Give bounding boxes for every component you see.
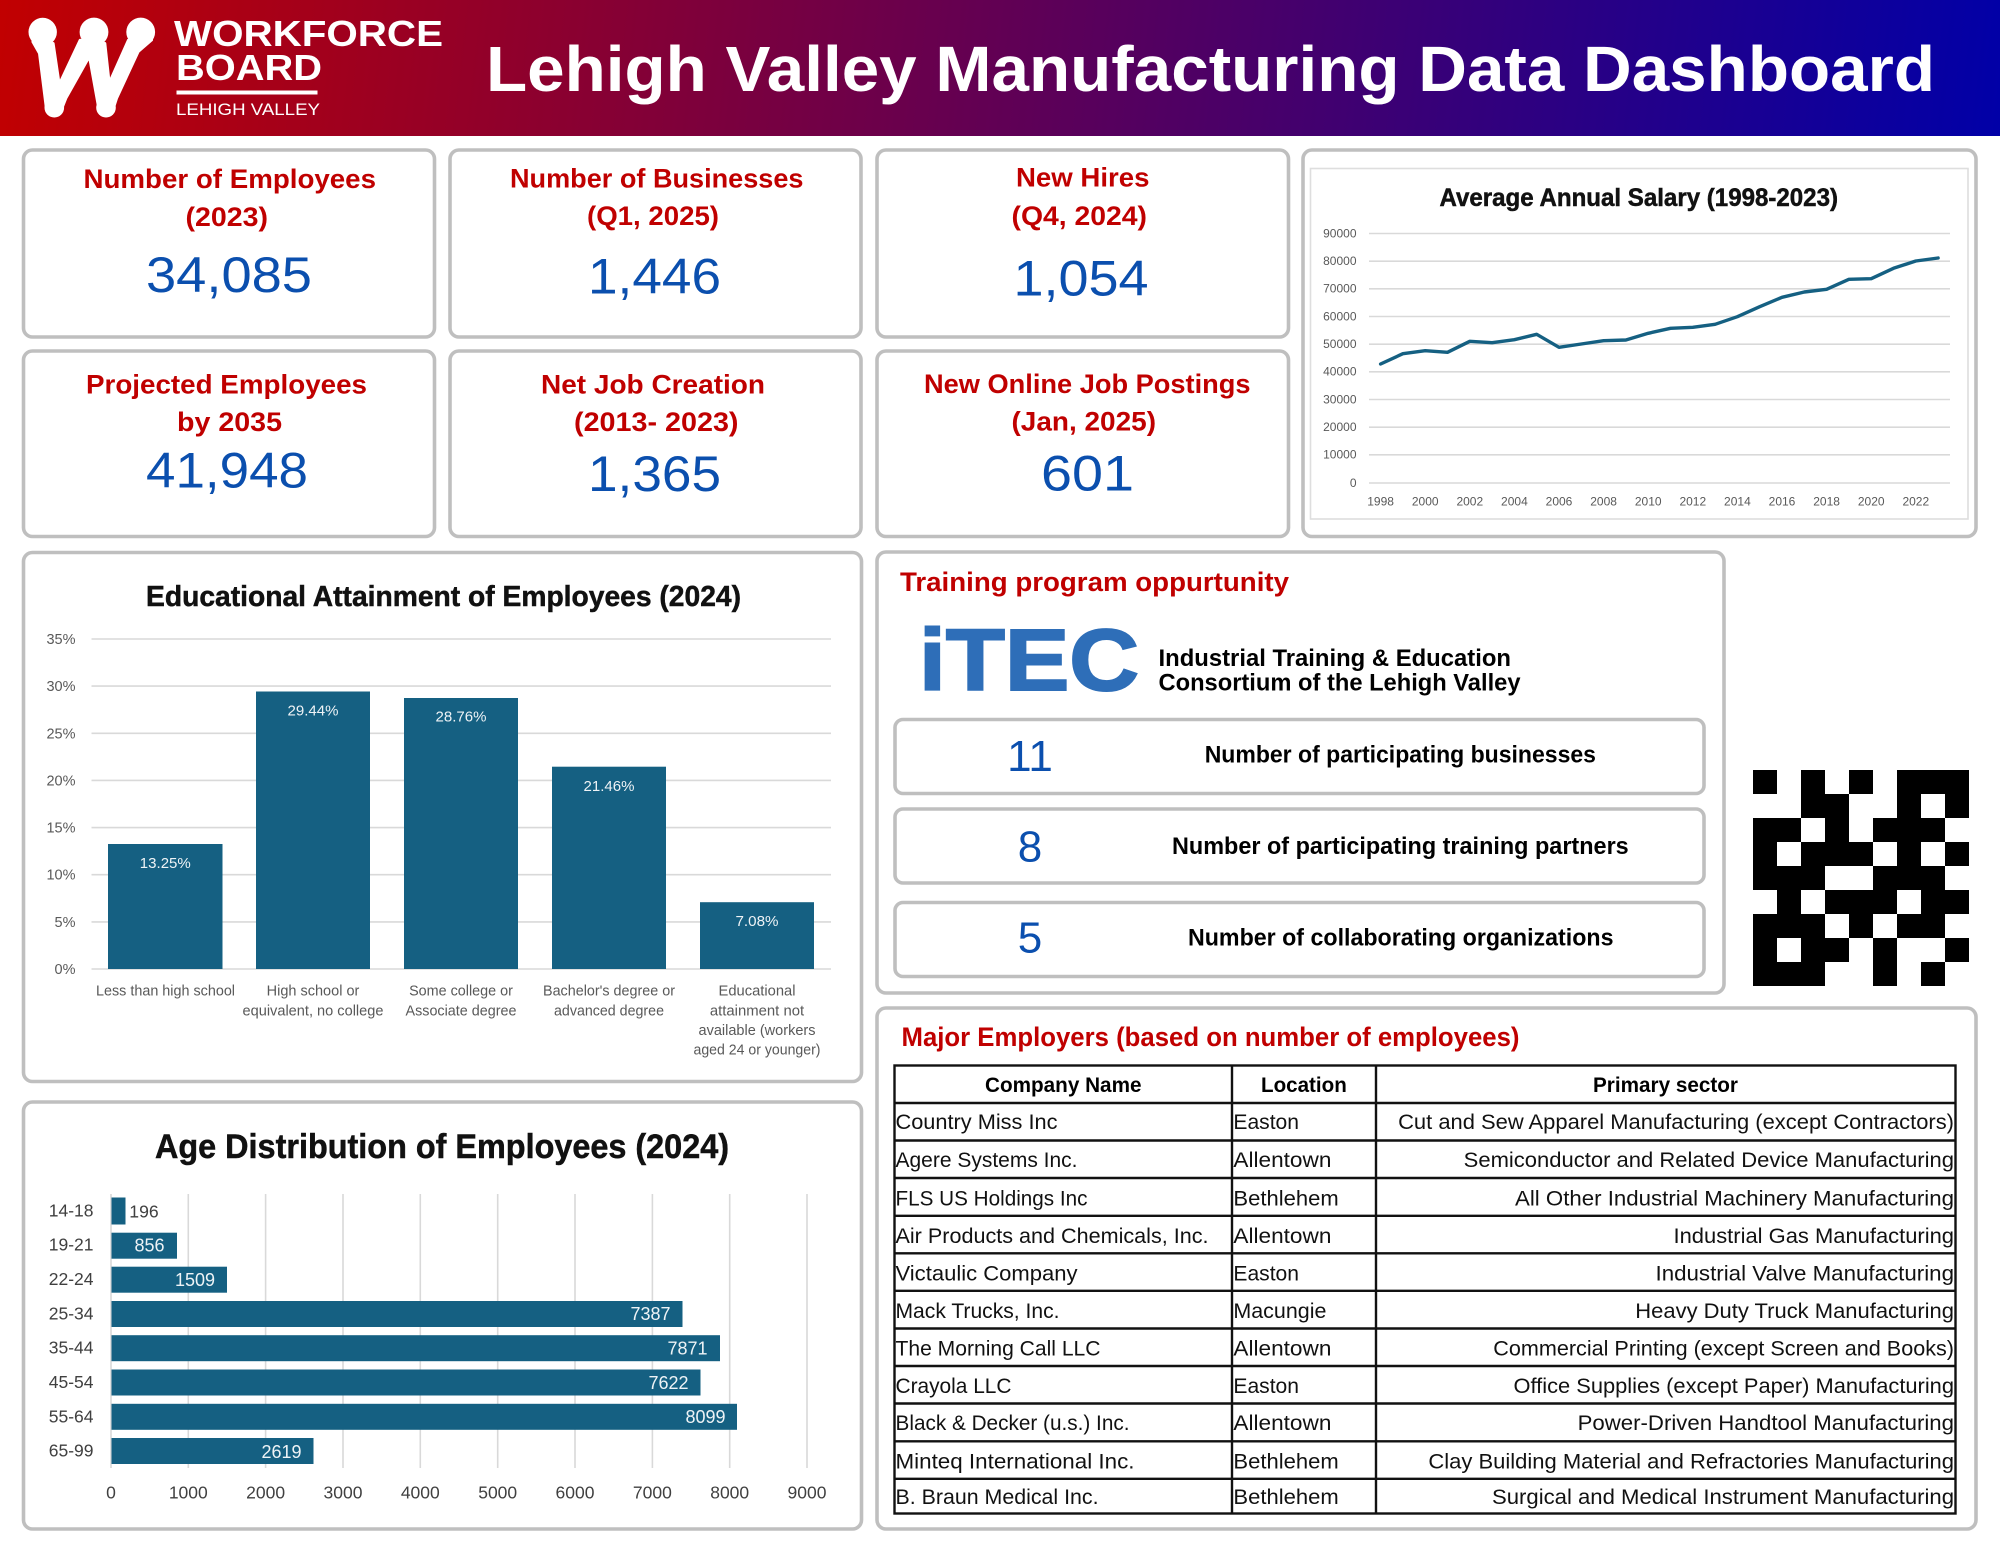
- table row: FLS US Holdings: FLS US Holdings Inc: [896, 1188, 1088, 1210]
- table row: Agere Systems: [896, 1149, 1954, 1172]
- table row: FLS US Holdings: [896, 1188, 1954, 1210]
- chart: x axis years: 2004: [1501, 494, 1528, 508]
- chart: category labels: attainment not: [710, 1004, 804, 1020]
- chart: age group labels: 25-34: [49, 1303, 94, 1323]
- panel: average annual salary: [1303, 150, 1976, 536]
- chart: y axis labels: 90000: [1323, 226, 1357, 240]
- kpi value: 1,365: [588, 446, 721, 502]
- chart: x axis years: 2020: [1858, 494, 1885, 508]
- chart: y axis percent labels: 20%: [46, 773, 76, 789]
- heading: major employers: Major Employers (based on number of employees): [902, 1022, 1520, 1052]
- chart: y axis labels: 10000: [1323, 448, 1357, 462]
- stat row: collaborating organizations: [895, 902, 1704, 976]
- heading: education chart: Educational Attainment of Employees (2024): [146, 581, 741, 613]
- kpi period: (Jan, 2025): [1012, 406, 1156, 436]
- chart: x axis years: 2018: [1813, 494, 1840, 508]
- bar: 22-24: [112, 1267, 227, 1293]
- chart: x axis counts: 7000: [633, 1482, 672, 1502]
- table row: Country Miss Inc: Country Miss Inc: [896, 1111, 1058, 1134]
- chart: y axis labels: 40000: [1323, 365, 1357, 379]
- kpi period: (2023): [186, 202, 268, 232]
- stat row: collaborating organizations: Number of collaborating organizations: [1188, 925, 1614, 952]
- title: Lehigh Valley Manufacturing Data Dashboard: [486, 33, 1935, 105]
- chart: y axis labels: 30000: [1323, 392, 1357, 406]
- table row: B. Braun: B. Braun Medical Inc.: [896, 1486, 1098, 1509]
- bar: 35-44: 7871: [667, 1338, 708, 1358]
- table row: Crayola: Office Supplies (except Paper) Manufacturing: [1514, 1375, 1954, 1398]
- chart: x axis years: 2010: [1635, 494, 1662, 508]
- kpi period: (Q1, 2025): [587, 201, 719, 231]
- stat row: collaborating organizations: 5: [1018, 914, 1042, 962]
- logo wordmark: LEHIGH VALLEY: [176, 100, 320, 119]
- kpi period: (2013- 2023): [574, 407, 738, 437]
- stat row: training partners: Number of participating training partners: [1172, 833, 1629, 860]
- table row: Crayola: Easton: [1233, 1375, 1299, 1398]
- table row: Mack Trucks: Heavy Duty Truck Manufacturing: [1635, 1300, 1954, 1323]
- bar: 19-21: 856: [134, 1236, 164, 1256]
- chart: age group labels: 35-44: [49, 1338, 94, 1358]
- kpi value: 34,085: [146, 247, 312, 303]
- heading: training program: Training program oppurtunity: [900, 567, 1289, 597]
- text: consortium name: Industrial Training & Education: [1158, 645, 1511, 672]
- table row: Morning Call: [896, 1338, 1954, 1360]
- table row: FLS US Holdings: Bethlehem: [1233, 1188, 1339, 1210]
- text: consortium name: [1158, 645, 1521, 696]
- chart: x axis years: 2016: [1769, 494, 1796, 508]
- table grid: [894, 1065, 1956, 1514]
- bar: 55-64: 8099: [685, 1407, 726, 1427]
- chart: age group labels: 55-64: [49, 1406, 94, 1426]
- chart: salary trend line: [1381, 258, 1938, 364]
- bar: bachelor's degree: 21.46%: [584, 779, 635, 795]
- table row: B. Braun: Bethlehem: [1233, 1486, 1339, 1509]
- kpi heading: Number of Employees: [84, 164, 376, 194]
- chart: x axis years: 2002: [1456, 494, 1483, 508]
- chart: category labels: High school or: [267, 984, 360, 1000]
- bar: 14-18: [112, 1198, 159, 1224]
- bar: some college: [404, 698, 518, 969]
- table row: Country Miss Inc: Easton: [1233, 1111, 1299, 1134]
- chart: category labels: Some college or: [409, 984, 513, 1000]
- chart: y axis labels: 80000: [1323, 254, 1357, 268]
- panel: net job creation: [450, 351, 861, 536]
- stat row: participating businesses: Number of participating businesses: [1205, 742, 1596, 769]
- chart: category labels: advanced degree: [554, 1004, 664, 1020]
- chart: y axis percent labels: 10%: [46, 868, 76, 884]
- chart: y axis percent labels: 5%: [55, 915, 76, 931]
- table row: Victaulic: Industrial Valve Manufacturing: [1656, 1262, 1954, 1286]
- stat row: participating businesses: 11: [1007, 732, 1053, 781]
- chart: x axis counts: 9000: [788, 1482, 827, 1502]
- table row: Mack Trucks: Macungie: [1233, 1300, 1326, 1323]
- table row: Minteq: Clay Building Material and Refractories Manufacturing: [1428, 1450, 1954, 1474]
- chart: category labels: Associate degree: [406, 1004, 516, 1020]
- heading: age chart: Age Distribution of Employees (2024): [155, 1128, 729, 1166]
- chart: y axis labels: [1323, 226, 1357, 490]
- table row: Agere Systems: Agere Systems Inc.: [896, 1149, 1078, 1172]
- panel: new online job postings: [877, 351, 1288, 536]
- panel: major employers: [877, 1008, 1976, 1529]
- chart: x axis counts: 1000: [169, 1482, 208, 1502]
- panel: projected employees: [24, 351, 434, 536]
- stat row: training partners: 8: [1018, 823, 1042, 872]
- chart: category labels: Educational: [718, 984, 796, 1000]
- table row: Air Products: Industrial Gas Manufacturing: [1674, 1225, 1954, 1248]
- chart: x axis counts: 6000: [556, 1482, 595, 1502]
- table row: Agere Systems: Semiconductor and Related Device Manufacturing: [1464, 1149, 1954, 1172]
- chart: category labels: equivalent, no college: [242, 1004, 384, 1020]
- chart: age group labels: 19-21: [49, 1235, 94, 1255]
- table row: Mack Trucks: [896, 1300, 1954, 1323]
- chart: x axis years: 2014: [1724, 494, 1751, 508]
- chart: x axis years: 2006: [1546, 494, 1573, 508]
- chart: y axis percent labels: 30%: [46, 679, 76, 695]
- chart: x axis years: 2000: [1412, 494, 1439, 508]
- table row: Air Products: [896, 1225, 1954, 1248]
- table row: B. Braun: [896, 1486, 1954, 1509]
- panel: training program: [877, 552, 1724, 993]
- chart: age group labels: 14-18: [49, 1200, 94, 1220]
- chart: y axis labels: 20000: [1323, 420, 1357, 434]
- logo wordmark: WORKFORCE: [174, 13, 443, 54]
- panel: educational attainment: [24, 552, 862, 1082]
- bar: 19-21: [112, 1233, 177, 1259]
- table row: Crayola: [896, 1375, 1954, 1398]
- kpi heading: New Online Job Postings: [924, 369, 1250, 399]
- chart: age group labels: [49, 1200, 94, 1460]
- bar: bachelor's degree: [552, 767, 666, 969]
- chart: x axis counts: 0: [106, 1482, 116, 1502]
- kpi value: 1,054: [1014, 251, 1148, 307]
- panel: number of businesses: [450, 150, 861, 337]
- chart: age group labels: 65-99: [49, 1440, 94, 1460]
- table row: FLS US Holdings: All Other Industrial Machinery Manufacturing: [1515, 1188, 1954, 1210]
- kpi value: 601: [1041, 446, 1134, 502]
- chart: x axis counts: 3000: [324, 1482, 363, 1502]
- panel: age distribution: [24, 1102, 862, 1529]
- kpi value: 1,446: [588, 248, 721, 304]
- chart: x axis years: 2012: [1679, 494, 1706, 508]
- chart: x axis years: 2022: [1902, 494, 1929, 508]
- table row: B. Braun: Surgical and Medical Instrument Manufacturing: [1492, 1486, 1954, 1509]
- table row: Black & Decker: Black & Decker (u.s.) Inc.: [896, 1412, 1130, 1435]
- table header: [985, 1074, 1738, 1097]
- chart: y axis labels: 60000: [1323, 309, 1357, 323]
- chart: y axis percent labels: 0%: [55, 962, 76, 978]
- bar: some college: 28.76%: [436, 710, 487, 726]
- kpi heading: New Hires: [1016, 163, 1150, 193]
- chart: y axis percent labels: 35%: [46, 632, 76, 648]
- chart: category labels: aged 24 or younger): [694, 1042, 820, 1058]
- chart: x axis years: 1998: [1367, 494, 1394, 508]
- chart: y axis percent labels: 15%: [46, 821, 76, 837]
- table row: Victaulic: Easton: [1233, 1262, 1299, 1286]
- kpi period: by 2035: [177, 407, 282, 437]
- heading: salary chart: Average Annual Salary (1998-2023): [1440, 184, 1838, 212]
- icon: workforce board W logo: [28, 18, 155, 117]
- panel: new hires: [877, 150, 1288, 337]
- table row: Minteq: [896, 1450, 1954, 1474]
- chart: x axis counts: 4000: [401, 1482, 440, 1502]
- chart: x axis counts: [106, 1482, 827, 1502]
- chart: x axis years: [1367, 494, 1929, 508]
- header banner: [0, 0, 2000, 136]
- chart: x axis years: 2008: [1590, 494, 1617, 508]
- logo wordmark: BOARD: [176, 47, 322, 88]
- table row: Morning Call: The Morning Call LLC: [896, 1338, 1100, 1360]
- table row: Crayola: Crayola LLC: [896, 1375, 1012, 1398]
- bar: 14-18: 196: [129, 1202, 159, 1222]
- chart: y axis percent labels: 25%: [46, 726, 76, 742]
- bar: high school: 29.44%: [288, 704, 339, 720]
- chart: y axis percent labels: [46, 632, 76, 978]
- kpi heading: Number of Businesses: [510, 164, 804, 194]
- chart: y axis labels: 50000: [1323, 337, 1357, 351]
- stat row: training partners: [895, 809, 1704, 883]
- chart: category labels: [96, 984, 820, 1058]
- bar: less than high school: 13.25%: [140, 856, 191, 872]
- bar: less than high school: [108, 844, 222, 969]
- bar: 45-54: 7622: [648, 1373, 688, 1393]
- table header: Primary sector: [1593, 1074, 1738, 1097]
- table row: Black & Decker: Power-Driven Handtool Manufacturing: [1578, 1412, 1954, 1435]
- table row: Minteq: Minteq International Inc.: [896, 1450, 1134, 1474]
- table row: Air Products: Allentown: [1233, 1225, 1331, 1248]
- bar: 25-34: [112, 1301, 682, 1327]
- bar: 65-99: 2619: [261, 1442, 302, 1462]
- chart: age group labels: 22-24: [49, 1269, 94, 1289]
- table row: Morning Call: Commercial Printing (except Screen and Books): [1493, 1338, 1954, 1360]
- panel: number of employees: [24, 150, 434, 337]
- chart: y axis labels: 70000: [1323, 282, 1357, 296]
- table row: Minteq: Bethlehem: [1233, 1450, 1339, 1474]
- logo wordmark: [174, 13, 443, 119]
- kpi heading: Projected Employees: [86, 369, 367, 399]
- chart: y axis labels: 0: [1350, 476, 1357, 490]
- bar: high school: [256, 692, 370, 969]
- bar: not available: 7.08%: [736, 914, 779, 930]
- table row: Black & Decker: [896, 1412, 1954, 1435]
- chart: category labels: Less than high school: [96, 984, 235, 1000]
- table row: Air Products: Air Products and Chemicals, Inc.: [896, 1225, 1208, 1248]
- kpi heading: Net Job Creation: [541, 369, 765, 399]
- stat row: participating businesses: [895, 720, 1704, 794]
- table row: Morning Call: Allentown: [1233, 1338, 1331, 1360]
- kpi period: (Q4, 2024): [1012, 201, 1147, 231]
- chart: category labels: available (workers: [698, 1023, 816, 1039]
- bar: 55-64: [112, 1404, 737, 1430]
- chart: age group labels: 45-54: [49, 1372, 94, 1392]
- bar: 65-99: [112, 1438, 314, 1464]
- table row: Black & Decker: Allentown: [1233, 1412, 1331, 1435]
- kpi value: 41,948: [146, 443, 308, 499]
- bar: not available: [700, 902, 814, 969]
- chart: x axis counts: 8000: [710, 1482, 749, 1502]
- text: consortium name: Consortium of the Lehigh Valley: [1158, 670, 1521, 696]
- table row: Agere Systems: Allentown: [1233, 1149, 1331, 1172]
- bar: 22-24: 1509: [175, 1270, 215, 1290]
- table row: Victaulic: [896, 1262, 1954, 1286]
- table row: Country Miss Inc: [896, 1111, 1954, 1134]
- table row: Country Miss Inc: Cut and Sew Apparel Manufacturing (except Contractors): [1398, 1111, 1954, 1134]
- chart: category labels: Bachelor's degree or: [543, 984, 675, 1000]
- logo: iTEC: iTEC: [919, 612, 1139, 709]
- table header: Location: [1261, 1074, 1347, 1097]
- icon: qr code: [1753, 770, 1969, 986]
- table row: Mack Trucks: Mack Trucks, Inc.: [896, 1300, 1060, 1323]
- chart: x axis counts: 2000: [246, 1482, 285, 1502]
- bar: 25-34: 7387: [630, 1304, 670, 1324]
- bar: 45-54: [112, 1370, 700, 1396]
- table row: Victaulic: Victaulic Company: [896, 1262, 1078, 1286]
- table header: Company Name: [985, 1074, 1142, 1097]
- chart: x axis counts: 5000: [478, 1482, 517, 1502]
- bar: 35-44: [112, 1335, 720, 1361]
